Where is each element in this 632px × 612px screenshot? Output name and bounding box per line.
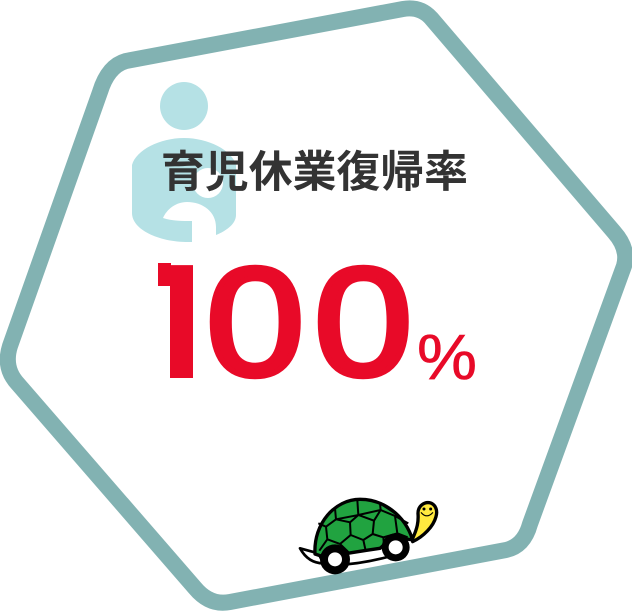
icon: parent holding child — [132, 82, 236, 242]
icon: turtle on wheels — [300, 499, 437, 574]
shell — [315, 499, 413, 557]
shell pattern — [318, 500, 408, 552]
neck and head — [413, 503, 437, 542]
wheels — [320, 544, 350, 574]
heading: 育児休業復帰率 — [161, 149, 468, 197]
tail — [300, 548, 323, 563]
statistic: 100 percent: % — [417, 321, 477, 393]
belly — [330, 543, 395, 565]
statistic: 100 percent: 1 — [108, 230, 236, 413]
statistic: 100 percent: 0 — [206, 237, 304, 408]
statistic: 100 percent: 0 — [314, 237, 412, 408]
statistic: 100 percent — [158, 263, 475, 380]
